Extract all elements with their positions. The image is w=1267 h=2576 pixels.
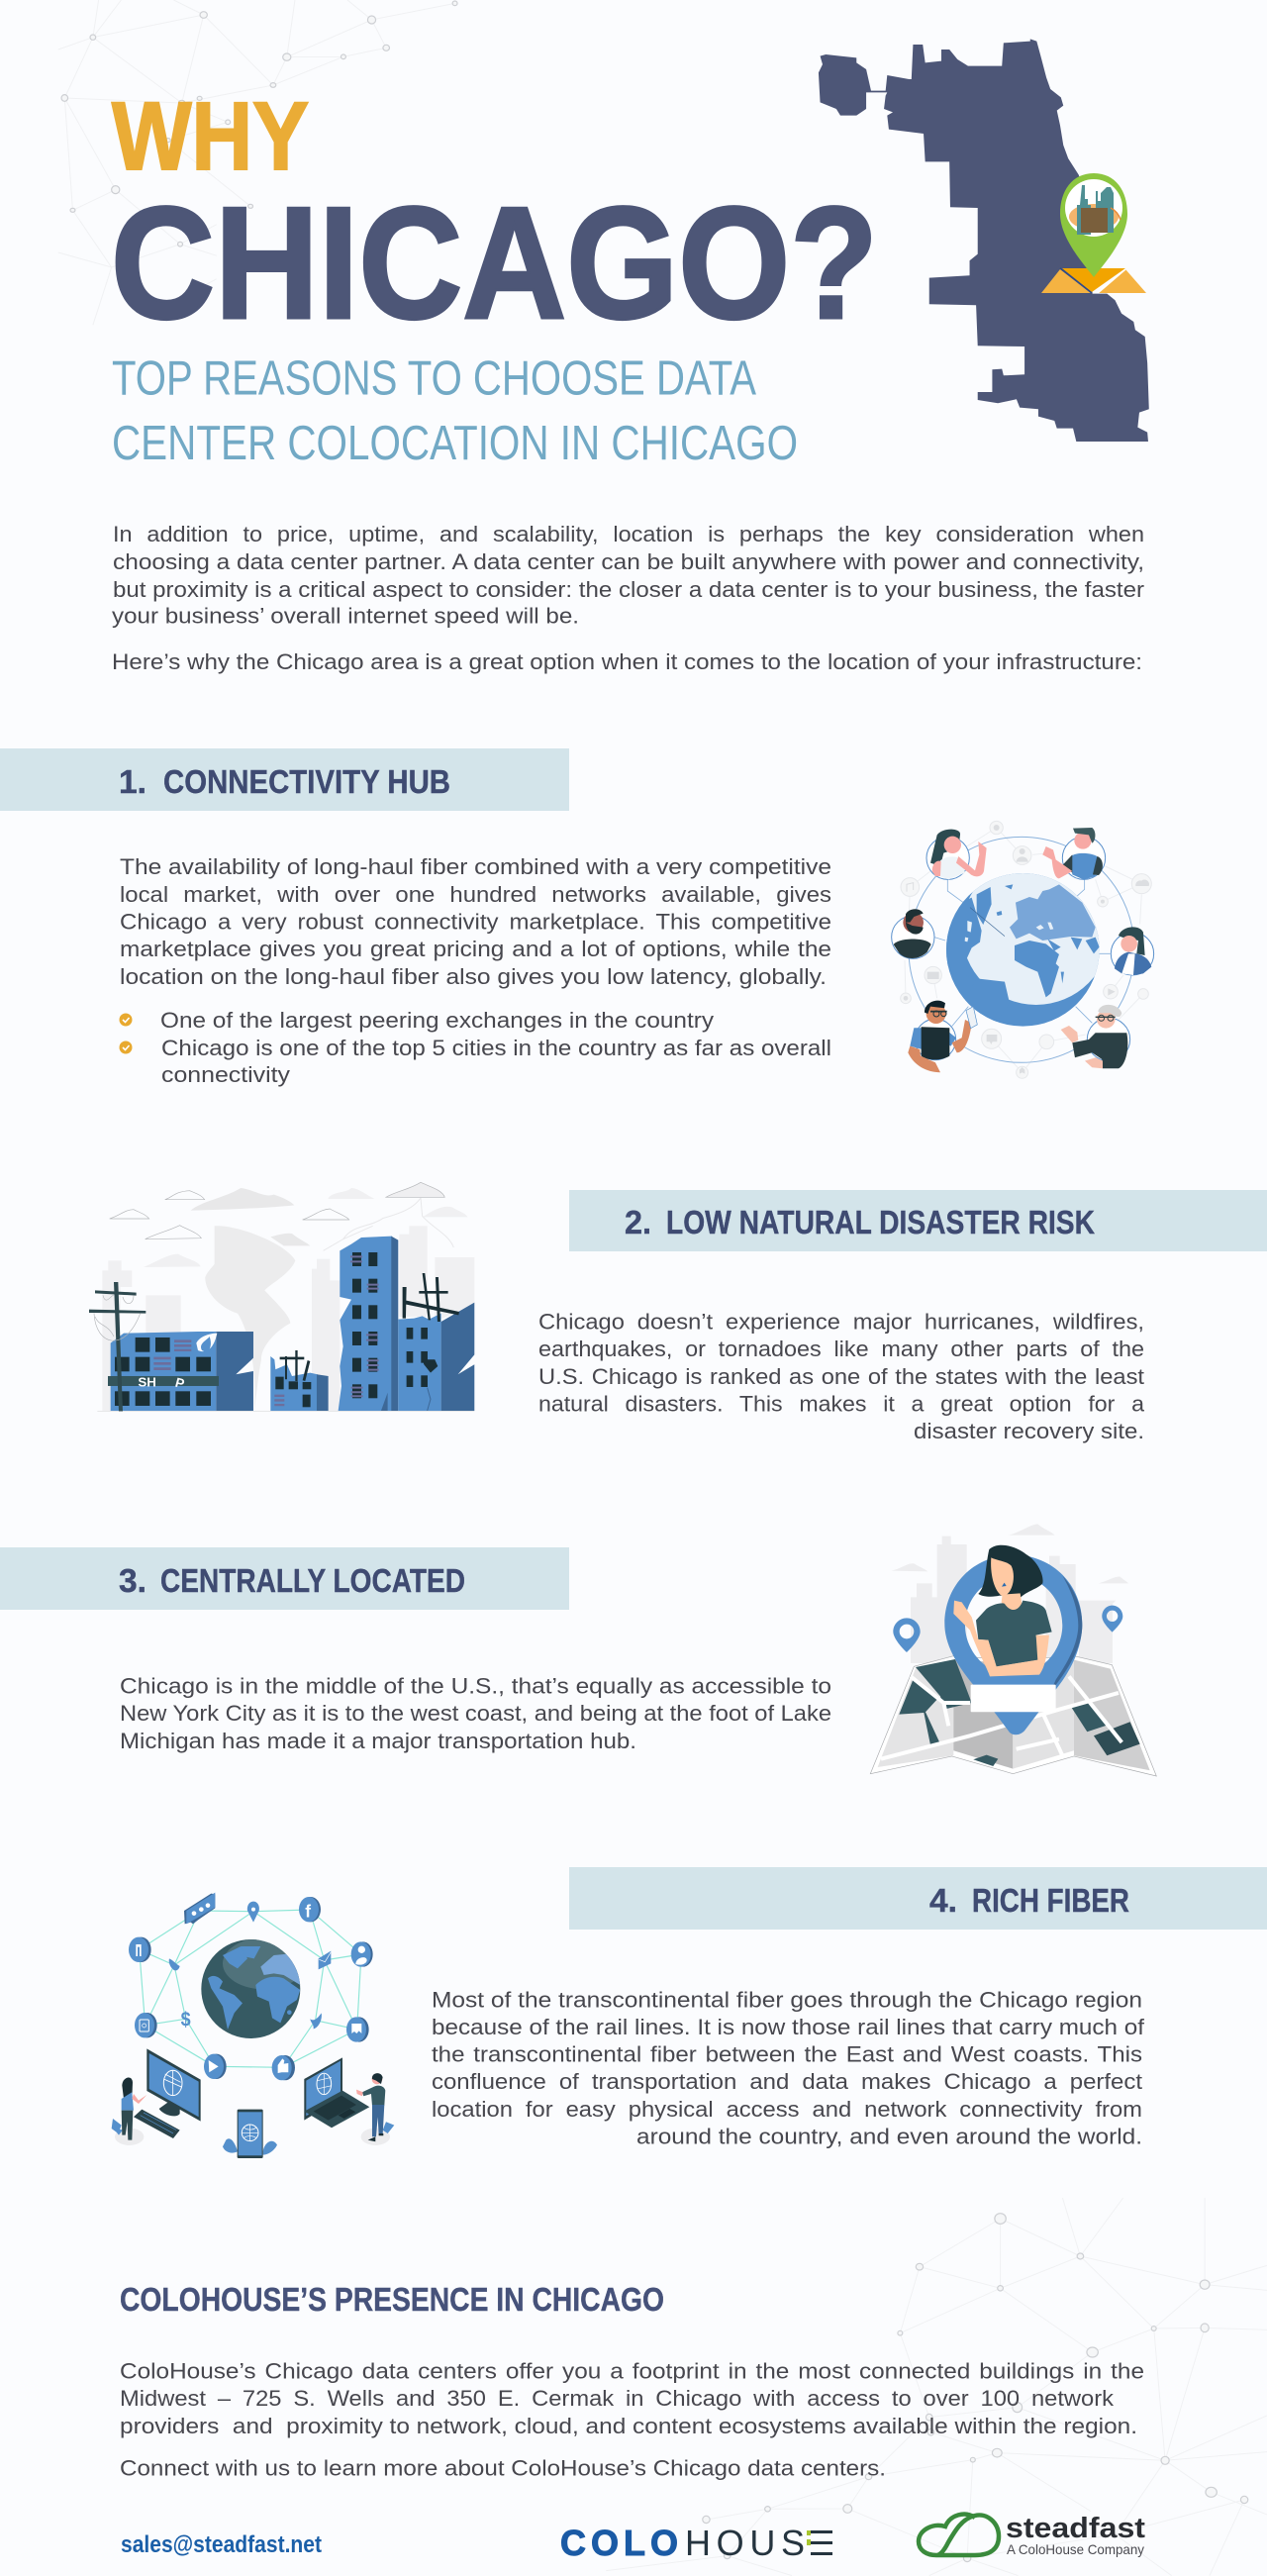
chicago map bbox=[819, 39, 1149, 442]
bullet list: connectivity bbox=[161, 1062, 291, 1087]
panel: section 3 centrally located bbox=[0, 1524, 1156, 1776]
heading banner 1: CONNECTIVITY HUB bbox=[163, 763, 450, 800]
woman bbox=[953, 1545, 1052, 1676]
section 4 body text: because of the rail lines. It is now those rail lines that carry much of bbox=[432, 2015, 1145, 2039]
contact email: sales@steadfast.net bbox=[121, 2531, 322, 2558]
closing body text: Midwest – 725 S. Wells and 350 E. Cermak in Chicago with access to over 100 network bbox=[120, 2386, 1115, 2411]
illustration: storm damaged city: P bbox=[174, 1375, 186, 1391]
heading banner 4: 4. bbox=[929, 1882, 957, 1919]
section 2 body text bbox=[538, 1309, 1145, 1443]
bullet list: One of the largest peering exchanges in the country bbox=[160, 1008, 715, 1033]
location pin on folded map bbox=[1041, 173, 1146, 293]
heading banner 1: 1. bbox=[119, 763, 146, 800]
intro paragraph bbox=[112, 522, 1145, 674]
laptop bbox=[304, 2057, 369, 2128]
panel: colohouse presence in chicago bbox=[120, 2281, 1144, 2481]
section 3 body text: Chicago is in the middle of the U.S., that’s equally as accessible to bbox=[120, 1673, 831, 1699]
panel: section 1 connectivity hub bbox=[0, 748, 1154, 1087]
heading banner 2: LOW NATURAL DISASTER RISK bbox=[666, 1204, 1095, 1240]
section 2 body text: Chicago doesn’t experience major hurricanes, wildfires, bbox=[538, 1309, 1144, 1335]
section 3 body text: New York City as it is to the west coast, and being at the foot of Lake bbox=[120, 1701, 831, 1726]
small location pins bbox=[893, 1606, 1122, 1652]
middle ruin bbox=[270, 1356, 318, 1411]
intro paragraph: In addition to price, uptime, and scalability, location is perhaps the key consideration when bbox=[113, 522, 1144, 546]
section 4 body text: confluence of transportation and data makes Chicago a perfect bbox=[432, 2069, 1143, 2094]
heading banner 3: 3. bbox=[119, 1562, 146, 1599]
background network: bottom right bbox=[606, 2198, 1267, 2576]
person: woman top left bbox=[926, 830, 987, 879]
person: bearded man bbox=[892, 909, 934, 958]
subtitle bbox=[112, 352, 798, 470]
panel: section 4 rich fiber bbox=[112, 1867, 1267, 2158]
logo: colohouse: HOUS bbox=[685, 2523, 805, 2563]
section 1 body text: Chicago a very robust connectivity marketplace. This competitive bbox=[120, 909, 831, 935]
big location pin bbox=[944, 1555, 1082, 1734]
illustration: storm damaged city bbox=[89, 1182, 474, 1412]
woman figure bbox=[112, 2077, 146, 2145]
section 1 body text: location on the long-haul fiber also gives you low latency, globally. bbox=[120, 964, 827, 989]
title: why: WHY bbox=[112, 82, 309, 190]
intro paragraph: choosing a data center partner. A data center can be built anywhere with power and connectivity, bbox=[113, 549, 1144, 574]
logo: steadfast: A ColoHouse Company bbox=[1007, 2541, 1144, 2557]
heading banner 2: 2. bbox=[625, 1204, 651, 1240]
illustration: people around a globe bbox=[892, 821, 1154, 1078]
check icon bbox=[119, 1014, 133, 1026]
bullet list: Chicago is one of the top 5 cities in the country as far as overall bbox=[161, 1036, 831, 1060]
social icons: $ bbox=[181, 2009, 191, 2031]
tall building bbox=[339, 1237, 392, 1411]
title: chicago: CHICAGO? bbox=[111, 174, 878, 352]
intro paragraph: but proximity is a critical aspect to consider: the closer a data center is to your business, the faster bbox=[113, 577, 1145, 602]
smartphone bbox=[223, 2110, 277, 2158]
panel: section 2 low natural disaster risk bbox=[89, 1182, 1267, 1443]
section 4 body text: location for easy physical access and network connectivity from bbox=[432, 2097, 1142, 2122]
illustration: storm damaged city: SH bbox=[138, 1374, 156, 1389]
section 4 body text bbox=[432, 1988, 1145, 2148]
subtitle: TOP REASONS TO CHOOSE DATA bbox=[112, 352, 756, 406]
heading banner 4 bbox=[569, 1867, 1267, 1930]
cloud mark bbox=[919, 2515, 999, 2555]
social icons bbox=[129, 1893, 373, 2080]
person: older woman bbox=[1061, 1005, 1130, 1068]
person: man with phone bbox=[908, 1001, 977, 1072]
closing body text: providers and proximity to network, cloud, and content ecosystems available within the region. bbox=[120, 2414, 1137, 2438]
social icons: f bbox=[305, 1902, 311, 1922]
heading banner 3 bbox=[0, 1547, 569, 1610]
person: man top right bbox=[1042, 828, 1106, 880]
main shop building bbox=[111, 1332, 216, 1411]
folded map bbox=[870, 1656, 1156, 1776]
network globe bbox=[201, 1937, 305, 2038]
section 2 body text: earthquakes, or tornadoes like many other parts of the bbox=[538, 1337, 1144, 1361]
illustration: global network and devices bbox=[112, 1893, 394, 2158]
heading banner 4: RICH FIBER bbox=[972, 1882, 1129, 1919]
intro paragraph: Here’s why the Chicago area is a great option when it comes to the location of your infrastructure: bbox=[112, 649, 1142, 674]
check icon bbox=[119, 1041, 133, 1053]
subtitle: CENTER COLOCATION IN CHICAGO bbox=[112, 417, 798, 470]
logo: colohouse bbox=[560, 2523, 832, 2563]
map silhouette bbox=[819, 39, 1149, 442]
section 2 body text: U.S. Chicago is ranked as one of the states with the least bbox=[538, 1364, 1145, 1389]
section 1 body text: The availability of long-haul fiber combined with a very competitive bbox=[120, 854, 831, 879]
section 4 body text: the transcontinental fiber between the East and West coasts. This bbox=[432, 2041, 1142, 2067]
section 4 body text: Most of the transcontinental fiber goes through the Chicago region bbox=[432, 1988, 1142, 2012]
logo: colohouse: COLO bbox=[560, 2523, 678, 2563]
closing body text: ColoHouse’s Chicago data centers offer you a footprint in the most connected buildings in the bbox=[120, 2358, 1144, 2384]
right ruined building bbox=[398, 1314, 441, 1411]
section 1 body text bbox=[120, 854, 831, 989]
desktop monitor with keyboard bbox=[134, 2048, 201, 2138]
closing body text bbox=[120, 2358, 1144, 2481]
heading banner 2 bbox=[569, 1190, 1267, 1251]
section 1 body text: marketplace gives you great pricing and a lot of options, while the bbox=[120, 937, 831, 961]
section 3 body text bbox=[120, 1673, 831, 1753]
section 2 body text: disaster recovery site. bbox=[914, 1419, 1144, 1443]
section 3 body text: Michigan has made it a major transportation hub. bbox=[120, 1729, 636, 1753]
heading banner 3: CENTRALLY LOCATED bbox=[160, 1562, 465, 1599]
logo: steadfast bbox=[919, 2513, 1145, 2557]
illustration: woman in map pin bbox=[870, 1524, 1156, 1776]
bullet list bbox=[119, 1008, 831, 1087]
closing heading: COLOHOUSE’S PRESENCE IN CHICAGO bbox=[120, 2281, 664, 2318]
footer bbox=[121, 2513, 1145, 2563]
closing body text: Connect with us to learn more about ColoHouse’s Chicago data centers. bbox=[120, 2455, 886, 2481]
intro paragraph: your business’ overall internet speed will be. bbox=[112, 604, 579, 628]
tornado bbox=[205, 1226, 295, 1411]
utility pole bbox=[89, 1282, 146, 1412]
section 1 body text: local market, with over one hundred networks available, gives bbox=[120, 882, 831, 907]
heading banner 1 bbox=[0, 748, 569, 811]
section 2 body text: natural disasters. This makes it a great option for a bbox=[538, 1392, 1144, 1416]
logo: steadfast: steadfast bbox=[1006, 2513, 1145, 2544]
man figure bbox=[356, 2073, 394, 2145]
title block bbox=[111, 82, 878, 470]
person: woman right bbox=[1111, 927, 1154, 975]
background network: top left bbox=[58, 0, 457, 325]
section 4 body text: around the country, and even around the world. bbox=[636, 2125, 1142, 2148]
